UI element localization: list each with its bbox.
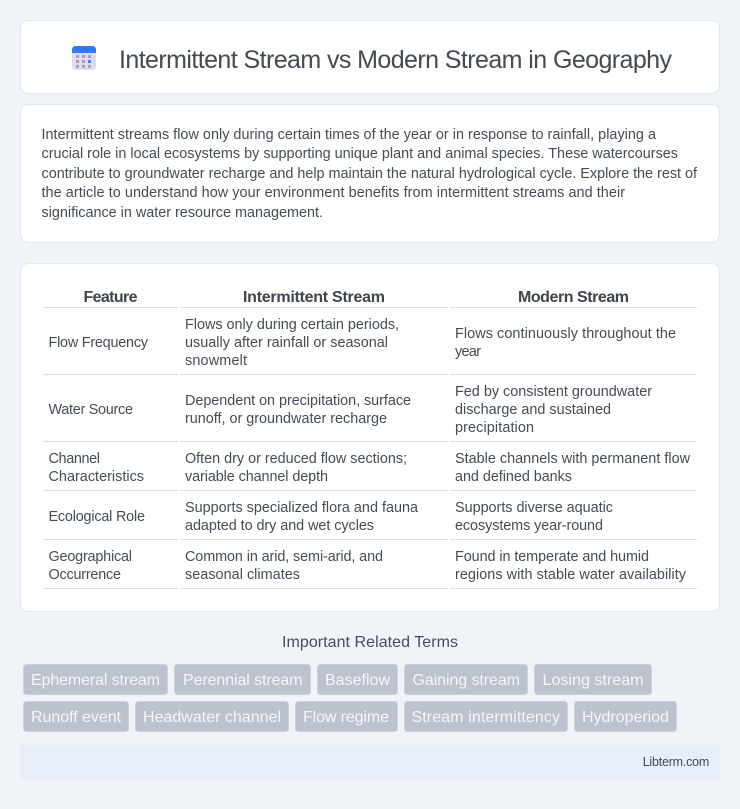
table row: geographical occurrence: seasonal climates	[185, 567, 300, 583]
table row: flow frequency: snowmelt	[185, 353, 247, 369]
table row: flow frequency: usually after rainfall or seasonal	[185, 335, 388, 351]
tag: perennial stream	[174, 664, 310, 694]
footer bar: Libterm.com	[643, 755, 709, 769]
tag: gaining stream: Gaining stream	[412, 672, 520, 689]
table row: geographical occurrence: Found in temperate and humid	[455, 549, 649, 565]
table row: water source: Fed by consistent groundwater	[455, 384, 652, 400]
table row: flow frequency: Flows only during certain periods,	[185, 317, 399, 333]
footer bar	[20, 745, 720, 779]
tag: baseflow	[318, 664, 398, 694]
panel: title header	[20, 20, 720, 94]
intro text: Intermittent streams flow only during certain times of the year or in response to rainfall, playing a	[42, 127, 656, 143]
panel: comparison table	[20, 264, 720, 612]
tag: hydroperiod: Hydroperiod	[582, 709, 669, 726]
table row: geographical occurrence: regions with stable water availability	[455, 567, 687, 583]
panel: intro paragraph	[20, 104, 720, 242]
intro text: the article to understand how your environment benefits from intermittent streams and their	[42, 185, 625, 201]
table row: water source: Dependent on precipitation, surface	[185, 393, 411, 409]
icon: calendar	[72, 46, 96, 70]
table row: ecological role	[43, 500, 697, 540]
tag: ephemeral stream: Ephemeral stream	[31, 672, 160, 689]
tag: losing stream	[534, 664, 652, 694]
table row: channel characteristics: Channel	[48, 451, 100, 467]
table row: flow frequency: year	[455, 344, 481, 360]
table row: water source: Water Source	[48, 402, 133, 418]
table row: water source: runoff, or groundwater recharge	[185, 411, 387, 427]
table row: geographical occurrence	[43, 549, 697, 589]
tag: headwater channel: Headwater channel	[143, 709, 281, 726]
table row: channel characteristics: and defined banks	[455, 469, 572, 485]
table row: ecological role: ecosystems year-round	[455, 518, 603, 534]
tag: hydroperiod	[574, 702, 676, 732]
tag: flow regime	[296, 702, 398, 732]
table header row: Feature	[84, 289, 138, 306]
table row: ecological role: Ecological Role	[48, 509, 145, 525]
table row: channel characteristics: Often dry or reduced flow sections;	[185, 451, 407, 467]
table header row: Modern Stream	[518, 289, 629, 306]
table row: water source: discharge and sustained	[455, 402, 611, 418]
title: Intermittent Stream vs Modern Stream in Geography	[119, 46, 672, 74]
table row: ecological role: adapted to dry and wet cycles	[185, 518, 374, 534]
tag: losing stream: Losing stream	[542, 672, 644, 689]
table row: channel characteristics: variable channel depth	[185, 469, 328, 485]
tag: flow regime: Flow regime	[303, 709, 389, 726]
intro text: crucial role in local ecosystems by supporting unique plant and animal species. These watercourses	[42, 146, 678, 162]
table header row: Intermittent Stream	[243, 289, 385, 306]
intro text: contribute to groundwater recharge and help maintain the natural hydrological cycle. Explore the rest of	[42, 166, 698, 182]
tag: gaining stream	[404, 664, 528, 694]
table row: flow frequency: Flow Frequency	[48, 335, 149, 351]
table row: flow frequency: Flows continuously throughout the	[455, 326, 676, 342]
tag: runoff event: Runoff event	[31, 709, 122, 726]
intro text	[42, 127, 698, 221]
tag: stream intermittency: Stream intermittency	[412, 709, 560, 726]
tag group: related terms	[24, 664, 676, 732]
tag: headwater channel	[136, 702, 288, 732]
table header row	[43, 289, 697, 308]
table row: water source	[43, 384, 697, 442]
table row: flow frequency	[43, 317, 697, 375]
table row: geographical occurrence: Geographical	[48, 549, 132, 565]
table row: channel characteristics	[43, 451, 697, 491]
tag: ephemeral stream	[24, 664, 168, 694]
table row: channel characteristics: Stable channels with permanent flow	[455, 451, 691, 467]
table row: geographical occurrence: Occurrence	[48, 567, 121, 583]
heading: important related terms: Important Related Terms	[282, 634, 458, 651]
tag: perennial stream: Perennial stream	[183, 672, 302, 689]
intro text: significance in water resource management.	[42, 205, 323, 221]
table row: channel characteristics: Characteristics	[48, 469, 144, 485]
tag: runoff event	[24, 702, 128, 732]
table row: geographical occurrence: Common in arid, semi-arid, and	[185, 549, 383, 565]
table row: ecological role: Supports specialized flora and fauna	[185, 500, 418, 516]
table row: water source: precipitation	[455, 420, 534, 436]
table row: ecological role: Supports diverse aquatic	[455, 500, 613, 516]
tag: baseflow: Baseflow	[325, 672, 390, 689]
tag: stream intermittency	[404, 702, 568, 732]
